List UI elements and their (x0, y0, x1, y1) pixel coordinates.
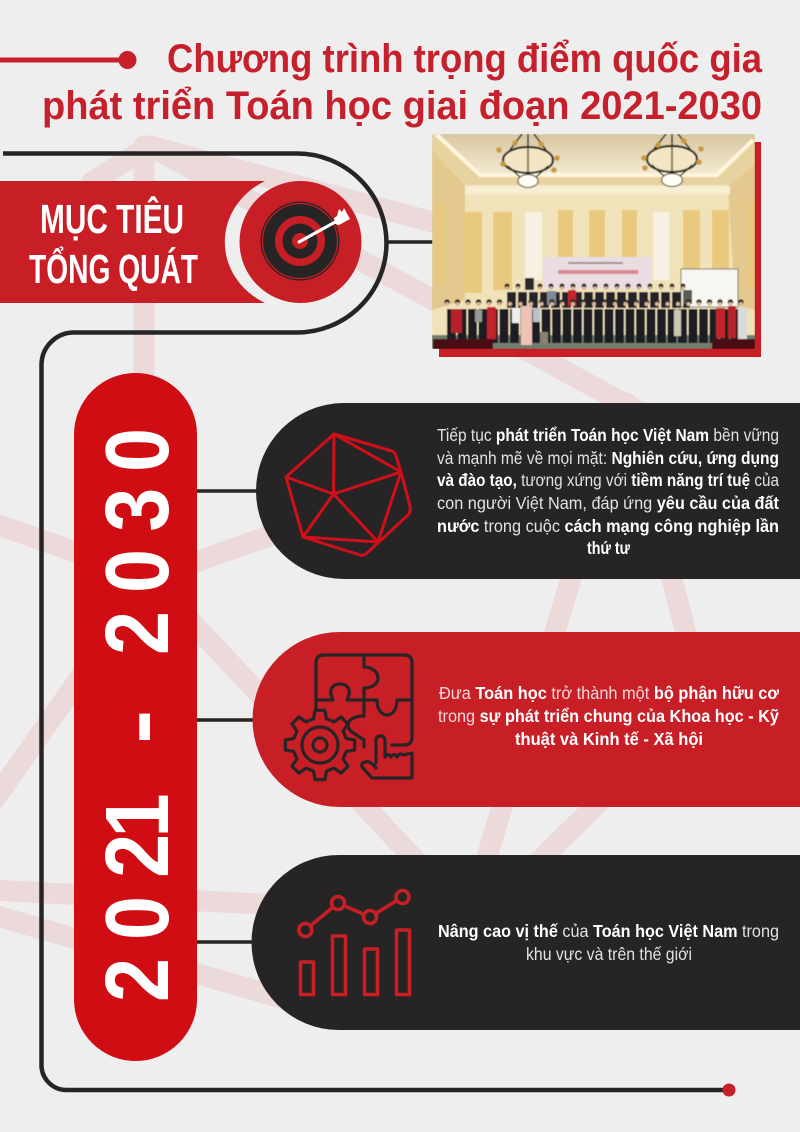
period label: - (86, 710, 187, 744)
panel: goal 3 (252, 855, 800, 1030)
title (42, 37, 763, 128)
goal 3 text: Nâng cao vị thế của Toán học Việt Nam trong (438, 921, 779, 941)
goal 1 text: thứ tư (587, 538, 630, 558)
icon: puzzle, gear and hand (285, 655, 412, 780)
panel: goal 2 (252, 632, 800, 807)
icon: polyhedron (286, 434, 410, 555)
banner heading: MỤC TIÊU (40, 196, 184, 242)
icon: line and bar chart (299, 890, 410, 994)
goal 1 text (437, 425, 779, 558)
goal 1 text: nước trong cuộc cách mạng công nghiệp lần (437, 516, 779, 536)
photo with red offset shadow (432, 134, 761, 357)
goal 1 text: Tiếp tục phát triển Toán học Việt Nam bền vững (437, 425, 779, 445)
goal 3 text: khu vực và trên thế giới (526, 944, 692, 964)
panel: goal 1 (256, 403, 800, 579)
goal 2 text: Đưa Toán học trở thành một bộ phận hữu cơ (439, 683, 780, 703)
front row of people (447, 302, 747, 345)
banner: general goal (0, 181, 265, 303)
goal 2 text: thuật và Kinh tế - Xã hội (515, 729, 703, 749)
banner heading: TỔNG QUÁT (29, 245, 198, 292)
chandeliers (496, 134, 704, 188)
goal 1 text: và đào tạo, tương xứng với tiềm năng trí tuệ của (437, 470, 779, 490)
title: phát triển Toán học giai đoạn 2021-2030 (42, 84, 762, 128)
timeline end dot (722, 1084, 736, 1096)
title accent line with dot (0, 51, 136, 69)
goal 1 text: con người Việt Nam, đáp ứng yêu cầu của đất (437, 493, 779, 513)
period pill (74, 373, 197, 1061)
connector to photo (388, 240, 433, 244)
period label: 2030 (86, 428, 187, 655)
goal 1 text: và mạnh mẽ về mọi mặt: Nghiên cứu, ứng dụng (437, 448, 779, 468)
connector lines from period pill to panels (195, 491, 258, 942)
icon: target with arrow (240, 181, 362, 303)
connector timeline line (3, 154, 729, 1090)
goal 2 text: trong sự phát triển chung của Khoa học - Kỹ (438, 706, 779, 726)
goal 2 text (438, 683, 780, 749)
period label: 2021 (86, 793, 187, 1002)
back row of people (507, 278, 692, 306)
banner heading (29, 196, 198, 292)
goal 3 text (438, 921, 779, 964)
period label (86, 428, 187, 1002)
